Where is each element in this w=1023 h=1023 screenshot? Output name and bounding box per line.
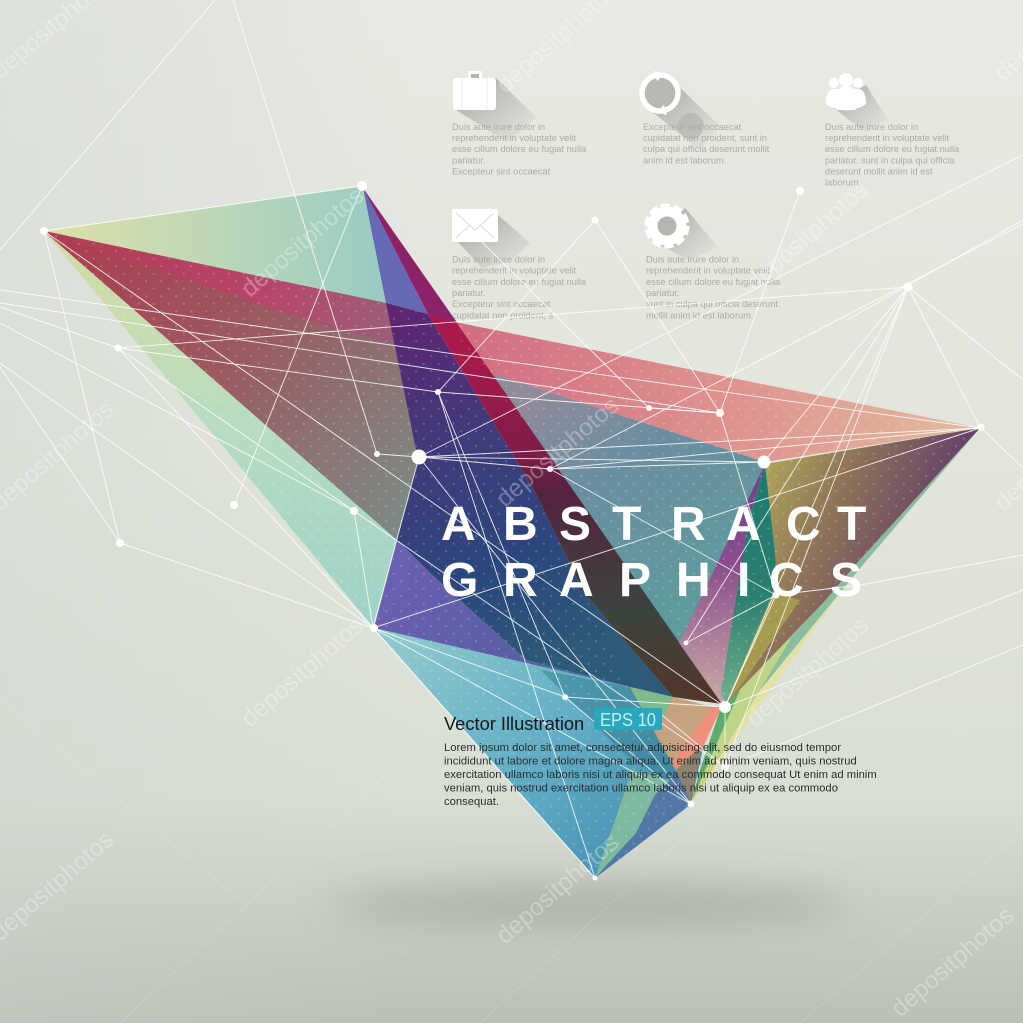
text: column one: reprehenderit in voluptate velit: [452, 133, 576, 143]
icon and text grid: [452, 71, 960, 320]
text: column three: laborum.: [825, 178, 861, 188]
watermarks: depositphotos: [491, 392, 624, 513]
lorem ipsum paragraph: exercitation ullamco laboris nisi ut aliquip ex ea commodo consequat Ut enim ad minim: [444, 769, 877, 781]
icon: arrows ring: [642, 71, 720, 150]
text: column one: Duis aute irure dolor in: [452, 122, 545, 132]
text: column two: anim id est laborum.: [643, 155, 726, 165]
text: column three: reprehenderit in voluptate velit: [825, 133, 949, 143]
text: column one: esse cillum dolore eu fugiat nulla: [452, 144, 587, 154]
text: column one: pariatur.: [452, 155, 485, 165]
text: row two column two: sunt in culpa qui officia deserunt: [646, 299, 778, 309]
lorem ipsum paragraph: incididunt ut labore et dolore magna aliqua. Ut enim ad minim veniam, quis nostrud: [444, 756, 857, 768]
watermarks: depositphotos: [491, 829, 624, 950]
lorem ipsum paragraph: Lorem ipsum dolor sit amet, consectetur adipisicing elit, sed do eiusmod tempor: [444, 742, 841, 754]
title: ABSTRACT: [441, 498, 866, 551]
watermarks: depositphotos: [236, 612, 369, 733]
text: row two column one: reprehenderit in voluptate velit: [452, 266, 576, 276]
watermarks: depositphotos: [886, 902, 1019, 1023]
title: GRAPHICS: [441, 554, 862, 607]
network nodes: [40, 181, 984, 880]
icon: briefcase: [453, 71, 537, 142]
text: column two: culpa qui officia deserunt mollit: [643, 144, 770, 154]
lorem ipsum paragraph: veniam, quis nostrud exercitation ullamco laboris nisi ut aliquip ex ea commodo: [444, 782, 838, 794]
text: row two column one: esse cillum dolore eu fugiat nulla: [452, 277, 587, 287]
text: column three: deserunt mollit anim id est: [825, 166, 933, 176]
text: row two column two: reprehenderit in voluptate velit: [646, 266, 770, 276]
text: column one: Excepteur sint occaecat: [452, 166, 551, 176]
text: column two: Excepteur sint occaecat: [643, 122, 742, 132]
icon: people: [826, 73, 888, 132]
icon: envelope: [452, 209, 530, 268]
text: row two column two: pariatur.: [646, 288, 679, 298]
text: row two column two: esse cillum dolore eu fugiat nulla: [646, 277, 781, 287]
text: row two column one: pariatur.: [452, 288, 485, 298]
text: row two column one: Excepteur sint occaecat: [452, 299, 551, 309]
text: row two column two: Duis aute irure dolor in: [646, 254, 739, 264]
text: row two column two: mollit anim id est laborum.: [646, 310, 753, 320]
watermarks: depositphotos: [741, 612, 874, 733]
vector illustration heading: Vector Illustration: [444, 713, 584, 734]
dot texture: [44, 231, 980, 878]
title: [441, 498, 866, 607]
icon: gear: [646, 206, 718, 260]
watermarks: depositphotos: [741, 176, 874, 297]
text: row two column one: Duis aute irure dolor in: [452, 254, 545, 264]
lorem ipsum paragraph: consequat.: [444, 796, 499, 808]
badge: EPS 10: EPS 10: [600, 710, 656, 730]
text: column three: pariatur. sunt in culpa qui officia: [825, 155, 955, 165]
text: column two: cupidatat non proident, sunt in: [643, 133, 767, 143]
abstract polygon shape: [44, 186, 980, 878]
text: row two column one: cupidatat non proident, s: [452, 310, 554, 320]
text: column three: Duis aute irure dolor in: [825, 122, 918, 132]
watermarks: depositphotos: [236, 182, 369, 303]
text: column three: esse cillum dolore eu fugiat nulla: [825, 144, 960, 154]
